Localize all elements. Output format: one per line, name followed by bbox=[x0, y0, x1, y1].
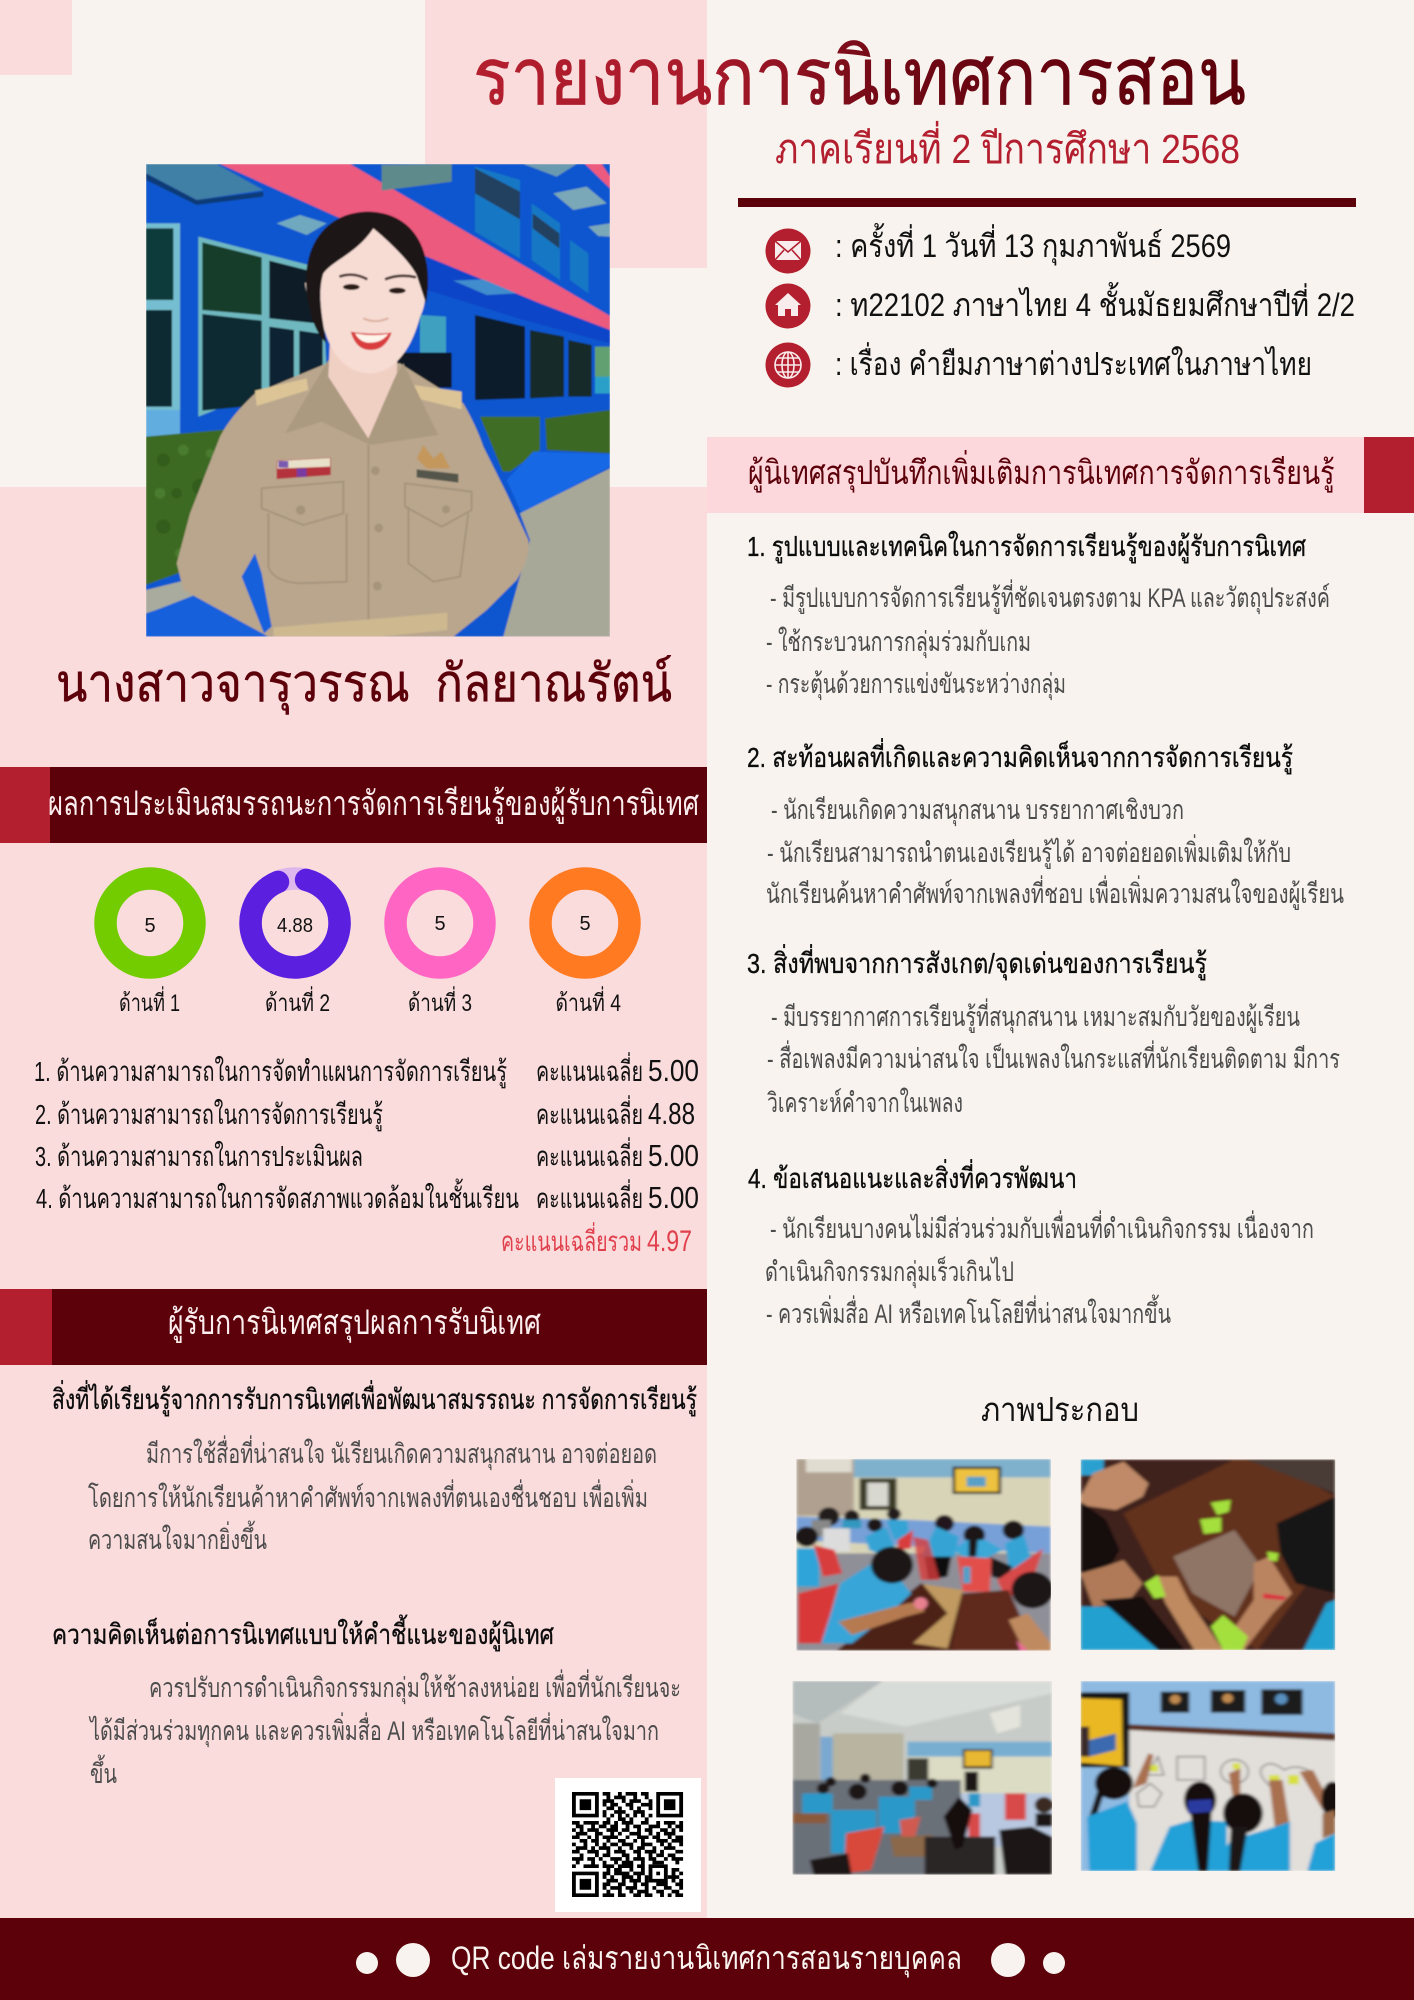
heading: teacher name: นางสาวจารุวรรณ กัลยาณรัตน์ bbox=[56, 655, 672, 715]
text block: section 2 bbox=[747, 738, 1344, 910]
footer dots right bbox=[991, 1943, 1065, 1977]
banner: supervisor notes bbox=[707, 437, 1414, 513]
text block: section 4: - ควรเพิ่มสื่อ AI หรือเทคโนโลยีที่น่าสนใจมากขึ้น bbox=[766, 1294, 1171, 1329]
banner: assessment results bbox=[0, 767, 707, 843]
text block: section 1 bbox=[747, 530, 1330, 701]
score list: คะแนนเฉลี่ย bbox=[536, 1095, 643, 1130]
score list: 5.00 bbox=[648, 1180, 699, 1215]
info line: topic: : เรื่อง คำยืมภาษาต่างประเทศในภาษาไทย bbox=[835, 342, 1312, 382]
score list: 3. ด้านความสามารถในการประเมินผล bbox=[35, 1140, 363, 1172]
score list: 4. ด้านความสามารถในการจัดสภาพแวดล้อมในชั้นเรียน bbox=[36, 1178, 519, 1214]
photo: wide classroom view bbox=[793, 1681, 1053, 1875]
photo: classroom group work bbox=[795, 1459, 1054, 1651]
info line: date: : ครั้งที่ 1 วันที่ 13 กุมภาพันธ์ 2569 bbox=[835, 223, 1231, 266]
overall average: 4.97 bbox=[647, 1225, 692, 1258]
banner: supervisee summary bbox=[0, 1289, 707, 1365]
chart: donut 4: 5 bbox=[579, 913, 591, 935]
chart: donut 1 bbox=[106, 878, 194, 1017]
footer bar bbox=[0, 1918, 1414, 2000]
heading: illustrations: ภาพประกอบ bbox=[981, 1391, 1139, 1428]
icon: globe bbox=[766, 342, 810, 388]
score list: คะแนนเฉลี่ย bbox=[536, 1179, 643, 1214]
text block: opinion: ได้มีส่วนร่วมทุกคน และควรเพิ่มสื่อ AI หรือเทคโนโลยีที่น่าสนใจมาก bbox=[89, 1712, 659, 1748]
text block: opinion: ขึ้น bbox=[90, 1754, 117, 1789]
score list: 2. ด้านความสามารถในการจัดการเรียนรู้ bbox=[35, 1098, 383, 1132]
text block: section 3: 3. สิ่งที่พบจากการสังเกต/จุดเด่นของการเรียนรู้ bbox=[747, 944, 1207, 981]
text block: section 4: ดำเนินกิจกรรมกลุ่มเร็วเกินไป bbox=[765, 1254, 1014, 1289]
score list: คะแนนเฉลี่ย bbox=[536, 1052, 643, 1087]
score list: 4.88 bbox=[648, 1096, 695, 1131]
text block: what was learned: สิ่งที่ได้เรียนรู้จากการรับการนิเทศเพื่อพัฒนาสมรรถนะ การจัดการเรียนรู้ bbox=[52, 1380, 697, 1417]
chart: donut 2 bbox=[250, 878, 340, 1017]
score list: คะแนนเฉลี่ย bbox=[536, 1137, 643, 1172]
score list: 5.00 bbox=[648, 1053, 699, 1088]
chart: donut 2: ด้านที่ 2 bbox=[265, 986, 330, 1017]
text block: section 2: - นักเรียนเกิดความสนุกสนาน บรรยากาศเชิงบวก bbox=[771, 795, 1184, 827]
photo: students at table with sticky notes bbox=[1081, 1459, 1335, 1650]
text block: what was learned: มีการใช้สื่อที่น่าสนใจ นัเรียนเกิดความสนุกสนาน อาจต่อยอด bbox=[146, 1435, 657, 1471]
banner: assessment results: ผลการประเมินสมรรถนะการจัดการเรียนรู้ของผู้รับการนิเทศ bbox=[48, 785, 699, 824]
chart: donut 3: ด้านที่ 3 bbox=[408, 986, 472, 1017]
text block: section 2: 2. สะท้อนผลที่เกิดและความคิดเห็นจากการจัดการเรียนรู้ bbox=[747, 738, 1293, 775]
chart: donut 4: ด้านที่ 4 bbox=[556, 986, 621, 1017]
banner: supervisee summary: ผู้รับการนิเทศสรุปผลการรับนิเทศ bbox=[168, 1304, 541, 1343]
chart: donut 1: 5 bbox=[144, 915, 156, 937]
panel: pink left column bbox=[0, 487, 707, 1918]
panel: pink header block bbox=[425, 0, 707, 268]
text block: section 4: 4. ข้อเสนอแนะและสิ่งที่ควรพัฒนา bbox=[748, 1159, 1077, 1194]
chart: donut 3: 5 bbox=[434, 913, 446, 935]
text block: what was learned: ความสนใจมากยิ่งขึ้น bbox=[88, 1520, 267, 1555]
header rule bbox=[738, 198, 1356, 207]
text block: section 1: - ใช้กระบวนการกลุ่มร่วมกับเกม bbox=[766, 626, 1031, 659]
text block: opinion: ความคิดเห็นต่อการนิเทศแบบให้คำชี้แนะของผู้นิเทศ bbox=[52, 1614, 554, 1652]
chart: donut 2: 4.88 bbox=[277, 915, 313, 937]
footer dots left bbox=[356, 1943, 430, 1977]
icon: house bbox=[766, 284, 810, 328]
footer bar: QR code เล่มรายงานนิเทศการสอนรายบุคคล bbox=[451, 1940, 962, 1978]
chart: donut 1: ด้านที่ 1 bbox=[119, 986, 180, 1017]
text block: section 1: - กระตุ้นด้วยการแข่งขันระหว่างกลุ่ม bbox=[766, 669, 1066, 701]
text block: what was learned: โดยการให้นักเรียนค้าหาคำศัพท์จากเพลงที่ตนเองชื่นชอบ เพื่อเพิ่ม bbox=[88, 1479, 648, 1513]
overall average: คะแนนเฉลี่ยรวม bbox=[501, 1222, 642, 1257]
title: รายงานการนิเทศการสอน bbox=[473, 32, 1246, 121]
photo: students at whiteboard bbox=[1081, 1681, 1343, 1871]
score list: 1. ด้านความสามารถในการจัดทำแผนการจัดการเรียนรู้ bbox=[34, 1055, 507, 1089]
text block: section 3 bbox=[747, 944, 1340, 1118]
text block: opinion: ควรปรับการดำเนินกิจกรรมกลุ่มให้ช้าลงหน่อย เพื่อที่นักเรียนจะ bbox=[149, 1669, 681, 1705]
text block: what was learned bbox=[52, 1380, 697, 1555]
score list bbox=[34, 1052, 699, 1215]
subtitle: ภาคเรียนที่ 2 ปีการศึกษา 2568 bbox=[775, 121, 1240, 172]
chart: donut 4 bbox=[540, 878, 630, 1017]
icon: envelope bbox=[766, 228, 810, 274]
text block: section 3: วิเคราะห์คำจากในเพลง bbox=[767, 1087, 963, 1118]
photo: teacher portrait bbox=[146, 164, 610, 637]
text block: opinion bbox=[52, 1614, 681, 1789]
QR code bbox=[555, 1778, 701, 1912]
panel: pink corner block bbox=[0, 0, 72, 75]
score list: 5.00 bbox=[648, 1138, 699, 1173]
text block: section 4 bbox=[748, 1159, 1314, 1329]
chart: donut 3 bbox=[396, 878, 484, 1017]
